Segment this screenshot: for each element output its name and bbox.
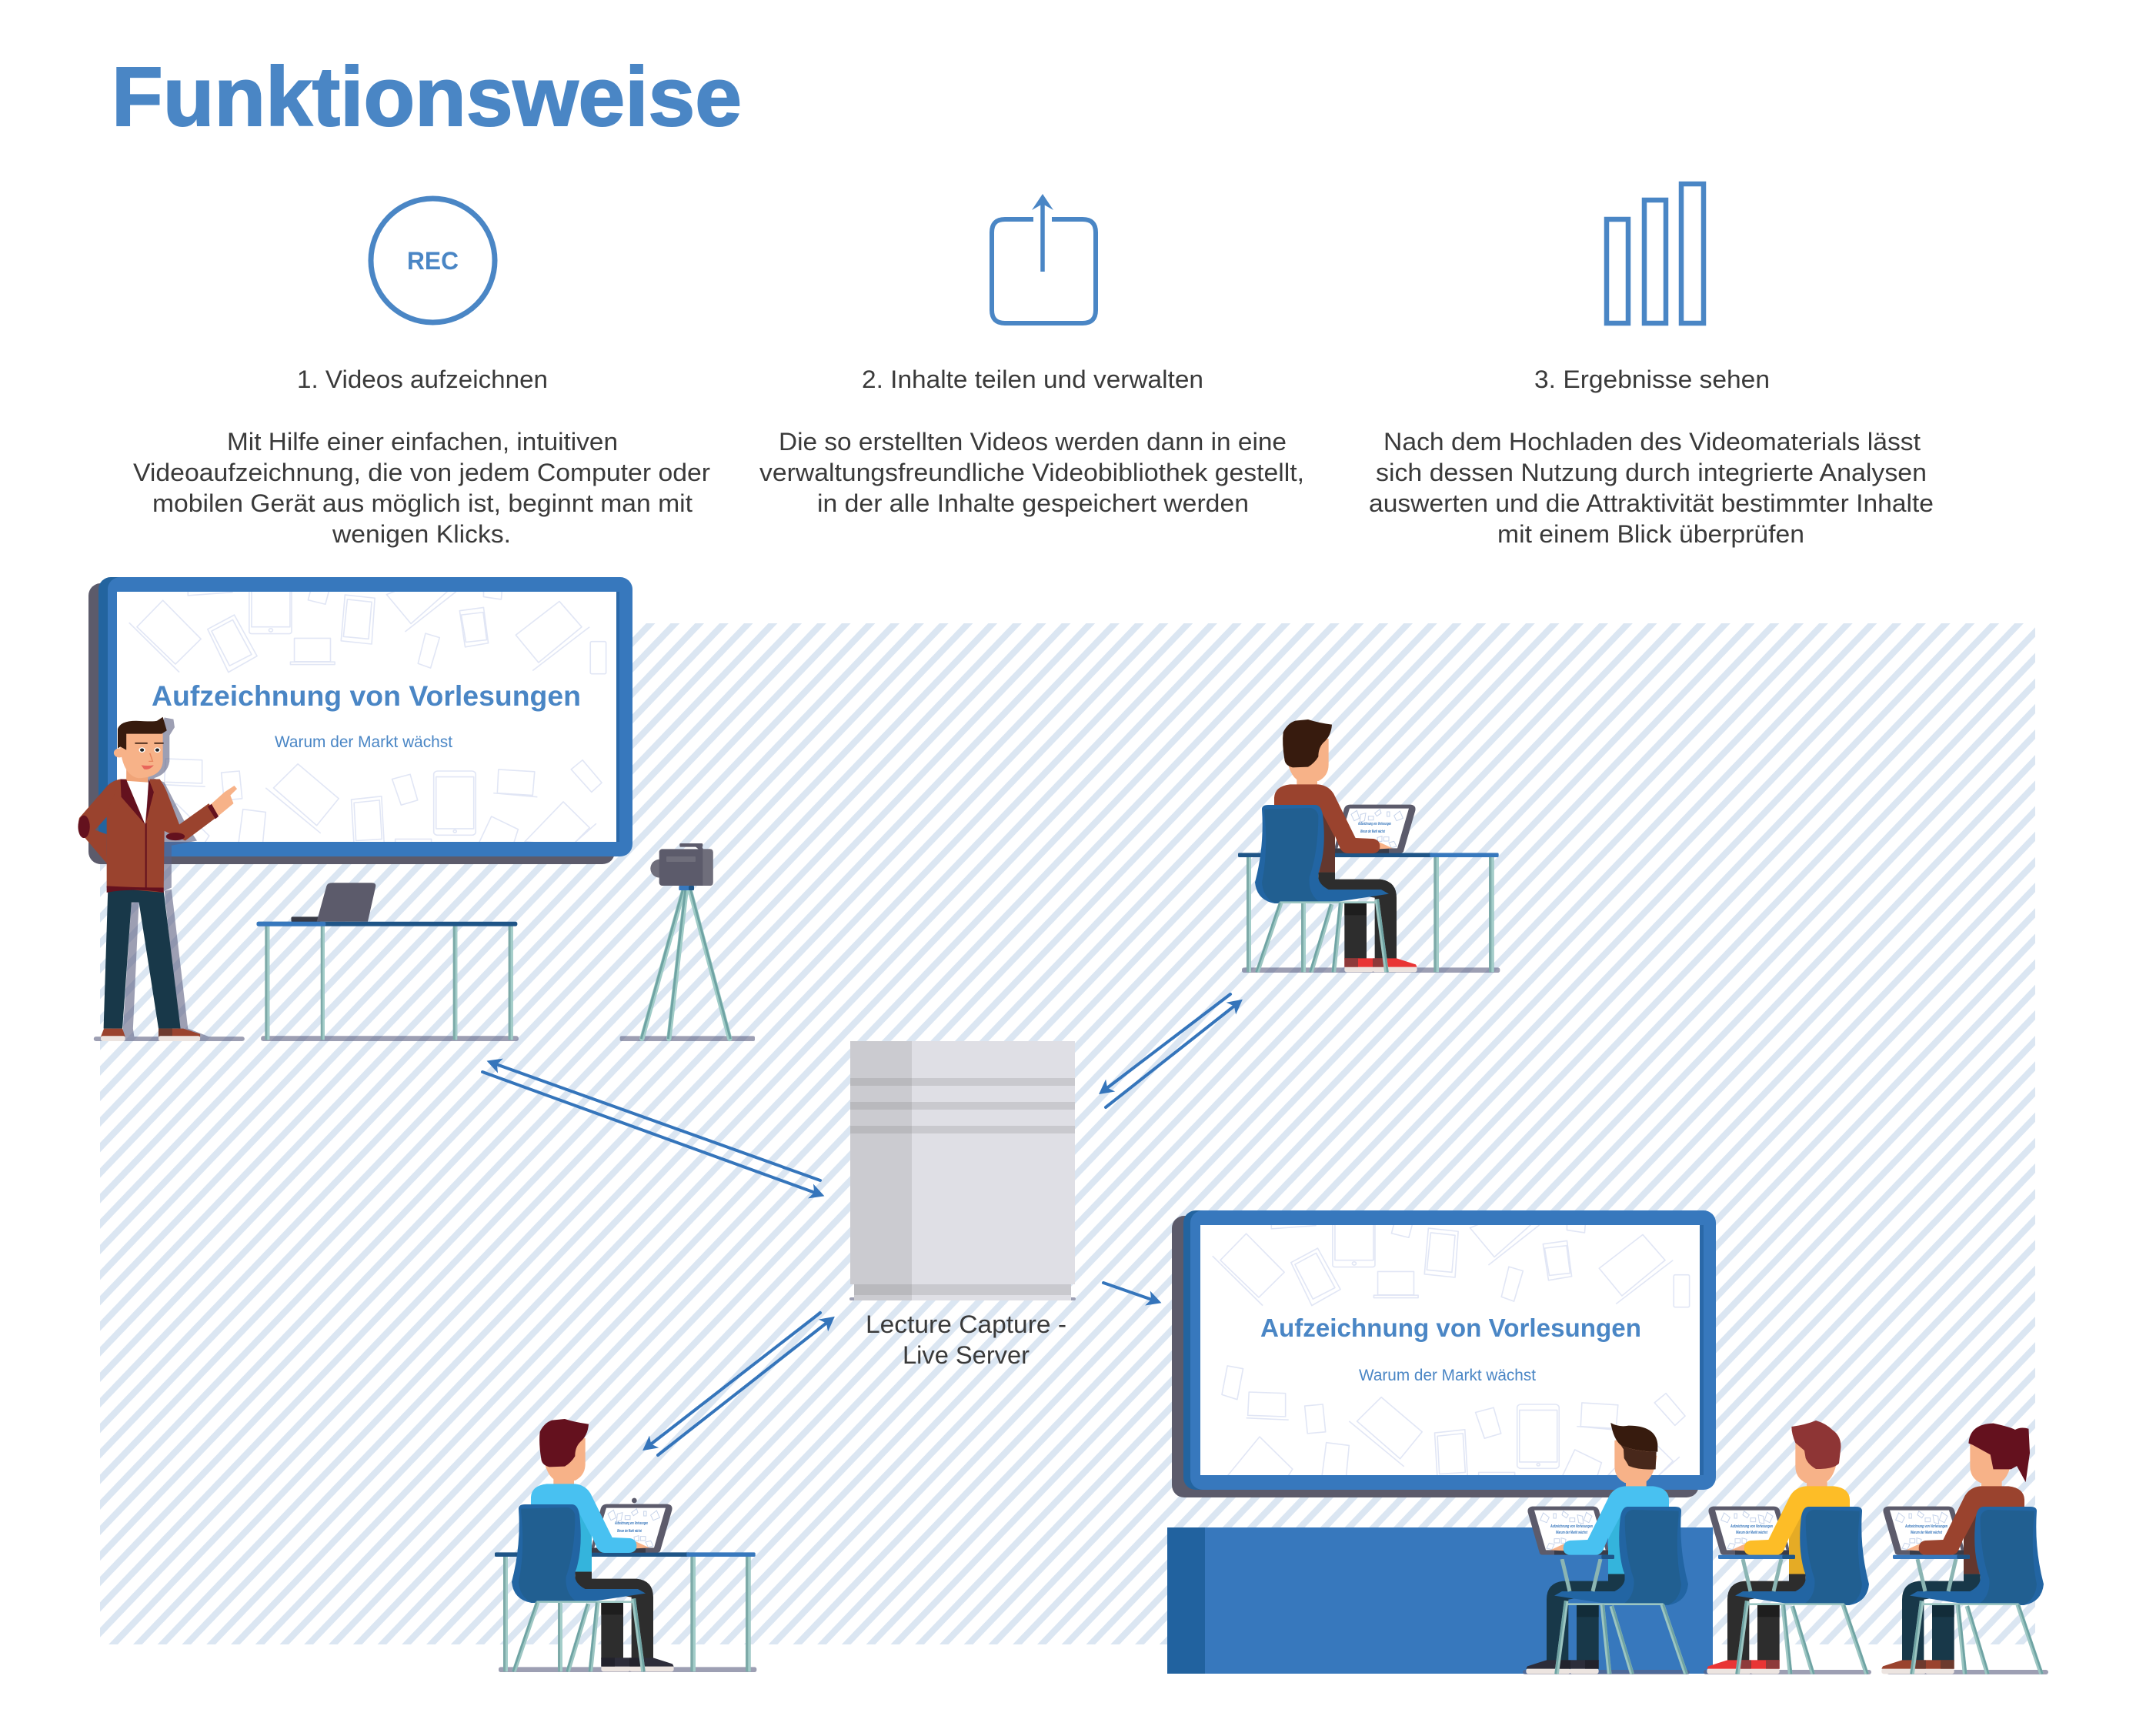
text block: step 1 (133, 366, 710, 548)
presentation screen: classroom (1172, 1210, 1716, 1497)
student at desk: top right: Warum der Markt wächst (1360, 830, 1385, 834)
text block: step 3 (1369, 366, 1934, 548)
presentation screen: lecturer (88, 577, 632, 864)
server label: Lecture Capture - (866, 1310, 1066, 1338)
text block: step 2: verwaltungsfreundliche Videobibliothek gestellt, (759, 459, 1304, 486)
text block: step 2: 2. Inhalte teilen und verwalten (862, 366, 1203, 393)
text block: step 1: wenigen Klicks. (332, 520, 511, 548)
text block: step 1: Mit Hilfe einer einfachen, intuitiven (227, 428, 618, 456)
audience member 2 (1704, 1421, 1871, 1674)
arrows: presenter and server (482, 1063, 820, 1194)
text block: step 3: Nach dem Hochladen des Videomaterials lässt (1383, 428, 1921, 456)
video camera on tripod (620, 843, 755, 1041)
arrows: bottom student and server (649, 1313, 829, 1455)
server label (866, 1310, 1066, 1369)
text block: step 2: in der alle Inhalte gespeichert werden (817, 489, 1249, 517)
presenter figure (78, 717, 245, 1041)
student at desk: bottom left: Warum der Markt wächst (617, 1529, 642, 1534)
icon: bar chart (1607, 184, 1704, 323)
student at desk: top right: Aufzeichnung von Vorlesungen (1357, 822, 1391, 826)
server (849, 1041, 1076, 1300)
audience member 1 (1523, 1423, 1690, 1674)
student at desk: bottom left: Aufzeichnung von Vorlesungen (614, 1521, 648, 1526)
icon: REC (371, 199, 495, 322)
presentation screen: classroom: Aufzeichnung von Vorlesungen (1260, 1314, 1641, 1342)
server label: Live Server (903, 1341, 1030, 1369)
icon: share (992, 194, 1096, 323)
text block: step 1: 1. Videos aufzeichnen (297, 366, 548, 393)
text block: step 1: mobilen Gerät aus möglich ist, beginnt man mit (152, 489, 693, 517)
student at desk: bottom left (495, 1419, 756, 1672)
text block: step 3: auswerten und die Attraktivität bestimmter Inhalte (1369, 489, 1934, 517)
classroom stage (1167, 1527, 1713, 1674)
presentation screen: lecturer: Warum der Markt wächst (275, 733, 452, 751)
title: Funktionsweise (112, 50, 742, 144)
text block: step 1: Videoaufzeichnung, die von jedem Computer oder (133, 459, 710, 486)
text block: step 2 (759, 366, 1304, 517)
arrows: top student and server (1105, 994, 1237, 1107)
presentation screen: classroom: Warum der Markt wächst (1359, 1367, 1536, 1384)
icon: REC: REC (407, 247, 459, 275)
audience member 3: Warum der Markt wächst (1911, 1531, 1942, 1535)
background hatch (100, 623, 2035, 1644)
student at desk: top right (1238, 719, 1500, 973)
text block: step 3: mit einem Blick überprüfen (1497, 520, 1804, 548)
text block: step 2: Die so erstellten Videos werden dann in eine (779, 428, 1287, 456)
audience member 1: Warum der Markt wächst (1556, 1531, 1587, 1535)
audience member 2: Aufzeichnung von Vorlesungen (1730, 1524, 1773, 1529)
text block: step 3: 3. Ergebnisse sehen (1534, 366, 1770, 393)
audience member 3: Aufzeichnung von Vorlesungen (1904, 1524, 1947, 1529)
audience member 3 (1881, 1424, 2048, 1674)
arrow: server to classroom (1103, 1283, 1154, 1300)
presentation screen: lecturer: Aufzeichnung von Vorlesungen (152, 680, 581, 712)
audience member 1: Aufzeichnung von Vorlesungen (1550, 1524, 1593, 1529)
audience member 2: Warum der Markt wächst (1736, 1531, 1767, 1535)
text block: step 3: sich dessen Nutzung durch integrierte Analysen (1376, 459, 1927, 486)
lecture desk with laptop (257, 883, 519, 1041)
